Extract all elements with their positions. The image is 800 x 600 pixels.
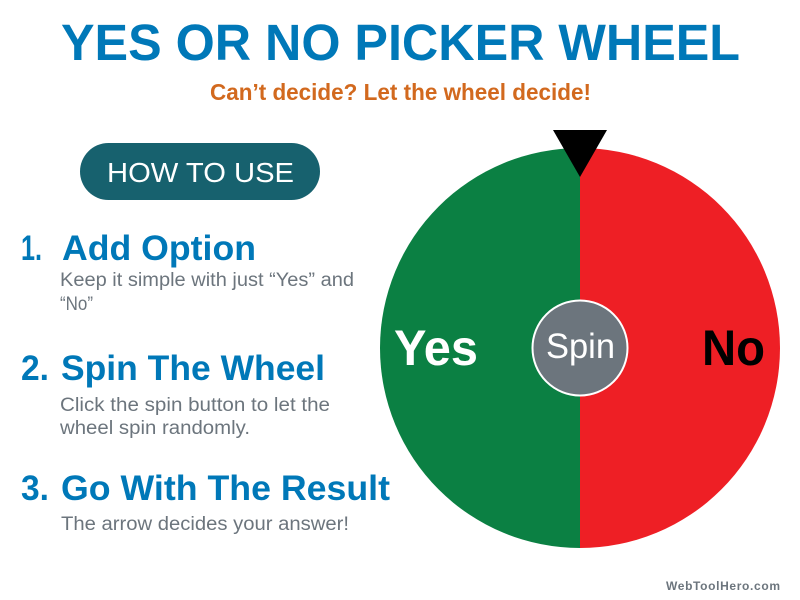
step 3: 3. bbox=[21, 469, 49, 508]
step 2: 2. bbox=[21, 349, 49, 388]
label: yes: Yes bbox=[394, 320, 478, 376]
step 2: Spin The Wheel bbox=[61, 349, 325, 388]
step 1: 1. bbox=[21, 229, 42, 268]
step 1: Add Option bbox=[62, 229, 256, 268]
how to use badge: HOW TO USE bbox=[107, 157, 294, 188]
icon: pointer arrow bbox=[553, 130, 607, 177]
subtitle: Can’t decide? Let the wheel decide! bbox=[210, 79, 591, 105]
wheel segment: yes bbox=[380, 148, 580, 548]
step 2 bbox=[21, 349, 330, 439]
picker wheel bbox=[380, 130, 780, 548]
step 3: Go With The Result bbox=[61, 469, 390, 508]
title: YES OR NO PICKER WHEEL bbox=[61, 14, 740, 71]
spin button: Spin bbox=[546, 327, 615, 366]
step 3: The arrow decides your answer! bbox=[61, 514, 349, 535]
label: no: No bbox=[702, 320, 765, 376]
step 1: “No” bbox=[60, 294, 93, 315]
step 2: wheel spin randomly. bbox=[59, 418, 250, 439]
step 1: Keep it simple with just “Yes” and bbox=[60, 270, 354, 291]
how to use badge bbox=[80, 143, 320, 200]
footer credit: WebToolHero.com bbox=[666, 579, 780, 593]
step 2: Click the spin button to let the bbox=[60, 395, 330, 416]
spin button bbox=[532, 300, 628, 396]
step 3 bbox=[21, 469, 390, 535]
step 1 bbox=[21, 229, 354, 315]
wheel segment: no bbox=[580, 148, 780, 548]
